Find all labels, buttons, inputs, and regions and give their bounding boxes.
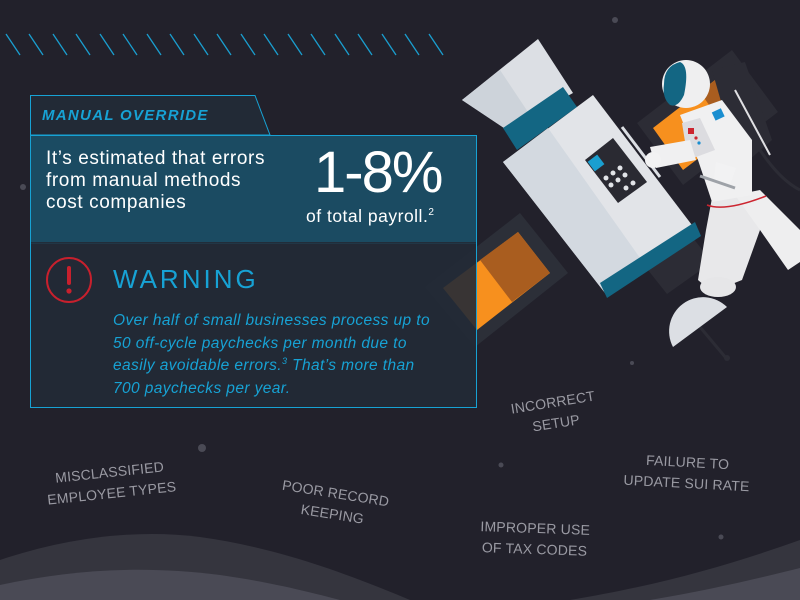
warning block <box>30 242 477 408</box>
stat block: of total payroll.2 <box>306 206 434 226</box>
decorative hatch <box>6 34 443 55</box>
stat text: It’s estimated that errors <box>46 148 265 169</box>
label: incorrect setup <box>510 388 596 435</box>
stat block <box>30 135 477 244</box>
warning text: Over half of small businesses process up to <box>113 312 430 329</box>
warning text: 50 off-cycle paychecks per month due to <box>113 334 407 352</box>
stat text: cost companies <box>46 192 186 213</box>
label: poor record keeping: POOR RECORD <box>281 477 390 509</box>
label: failure to update: UPDATE SUI RATE <box>623 472 750 494</box>
satellite neck funnel <box>462 39 577 150</box>
warning text <box>113 312 430 396</box>
connector <box>640 228 712 294</box>
solar panel right <box>637 50 778 185</box>
bottom waves <box>0 534 410 600</box>
label: poor record keeping: KEEPING <box>300 501 365 527</box>
dish <box>669 297 730 361</box>
big number: 1-8% <box>314 140 441 205</box>
keypad <box>585 138 647 203</box>
stat text <box>46 148 265 213</box>
label: misclassified: MISCLASSIFIED <box>54 458 165 486</box>
icon: warning <box>46 257 92 303</box>
label: incorrect setup: INCORRECT <box>510 388 596 417</box>
label: misclassified <box>47 458 177 508</box>
label: poor record keeping <box>281 477 390 527</box>
panel: manual override <box>30 95 477 408</box>
solar panel left <box>425 213 568 347</box>
label: incorrect setup: SETUP <box>531 411 581 435</box>
label: improper use: IMPROPER USE <box>480 518 590 538</box>
label: misclassified: EMPLOYEE TYPES <box>47 478 177 508</box>
stat text: from manual methods <box>46 170 241 191</box>
warning text: 700 paychecks per year. <box>113 380 290 396</box>
label: failure to update <box>623 452 750 494</box>
label: improper use: OF TAX CODES <box>482 539 587 559</box>
warning heading: WARNING <box>113 264 259 294</box>
astronaut <box>645 60 800 297</box>
label: improper use <box>480 518 590 559</box>
panel: manual override: MANUAL OVERRIDE <box>42 107 209 124</box>
label: failure to update: FAILURE TO <box>646 452 730 472</box>
heading tab <box>30 95 270 135</box>
satellite body <box>503 95 701 298</box>
stars <box>20 17 724 540</box>
warning text: easily avoidable errors.3 That’s more than <box>113 356 415 374</box>
